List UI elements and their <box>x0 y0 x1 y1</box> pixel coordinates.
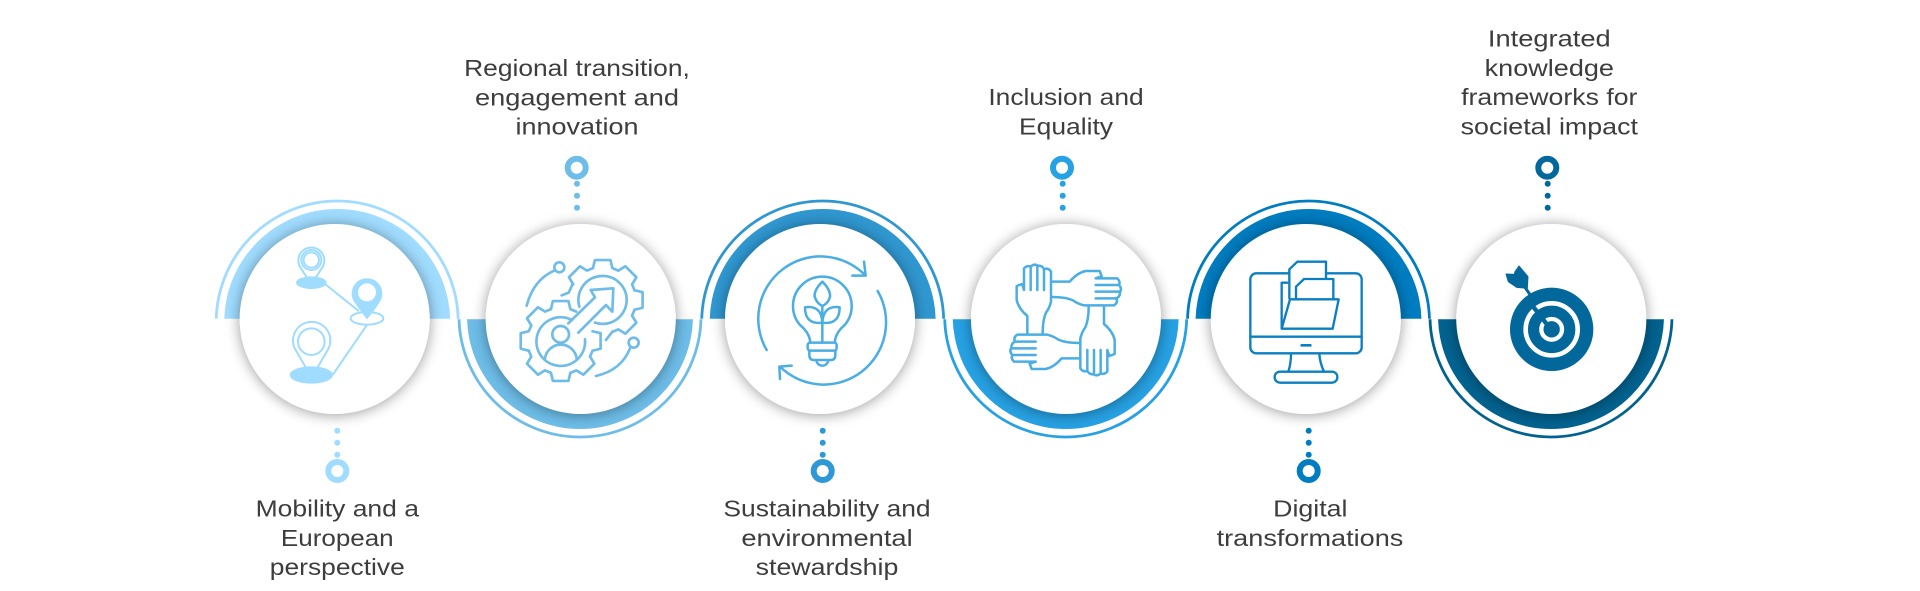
label 2: engagement and <box>475 84 679 110</box>
white circle 6 <box>1456 224 1646 414</box>
arc band 1 <box>214 200 460 319</box>
label 1: European <box>281 525 394 551</box>
connector dots 2 <box>568 159 586 211</box>
white circle 1 <box>240 224 430 414</box>
label 2 <box>464 55 690 139</box>
label 6: frameworks for <box>1461 84 1638 110</box>
label 6: Integrated <box>1488 26 1611 52</box>
step 2: Regional transition, engagement and innovation <box>459 55 701 437</box>
arc band 3 <box>700 200 946 319</box>
label 3: stewardship <box>756 554 898 580</box>
connector dots 6 <box>1538 159 1556 211</box>
label 6: knowledge <box>1485 55 1614 81</box>
label 2: innovation <box>516 113 638 139</box>
step 6: Integrated knowledge frameworks for societal impact <box>1430 26 1672 437</box>
connector dots 4 <box>1053 159 1071 211</box>
step 5: Digital transformations <box>1188 201 1430 551</box>
label 4: Inclusion and <box>988 84 1144 110</box>
arc band 6 <box>1428 319 1674 438</box>
white circle 4 <box>971 224 1161 414</box>
arc band 2 <box>458 319 702 438</box>
label 6: societal impact <box>1461 113 1639 139</box>
label 3 <box>723 496 931 580</box>
icon: map pins <box>290 247 383 384</box>
label 3: Sustainability and <box>723 496 931 522</box>
icon: gears with person and arrow <box>521 260 643 381</box>
arc band 4 <box>943 319 1188 438</box>
label 5 <box>1217 496 1403 551</box>
label 4: Equality <box>1019 113 1114 139</box>
connector dots 3 <box>814 428 832 480</box>
infographic: six step timeline <box>214 30 1674 580</box>
label 1 <box>256 496 419 580</box>
icon: four linked hands <box>1010 265 1121 375</box>
label 6 <box>1461 26 1639 139</box>
icon: light bulb with leaves and cycle arrows <box>758 256 886 385</box>
label 5: transformations <box>1217 525 1403 551</box>
step 1: Mobility and a European perspective <box>216 201 458 580</box>
label 1: perspective <box>270 554 405 580</box>
connector dots 5 <box>1300 428 1318 480</box>
step 4: Inclusion and Equality <box>945 84 1187 437</box>
white circle 2 <box>486 224 676 414</box>
label 2: Regional transition, <box>464 55 690 81</box>
icon: target with dart <box>1506 266 1593 371</box>
arc band 5 <box>1186 200 1431 319</box>
icon: monitor with folder <box>1250 262 1362 383</box>
connector dots 1 <box>328 428 346 480</box>
label 4 <box>988 84 1144 139</box>
label 5: Digital <box>1273 496 1347 522</box>
label 3: environmental <box>741 525 913 551</box>
label 1: Mobility and a <box>256 496 419 522</box>
step 3: Sustainability and environmental stewardship <box>702 201 944 580</box>
white circle 5 <box>1211 224 1401 414</box>
white circle 3 <box>725 224 915 414</box>
